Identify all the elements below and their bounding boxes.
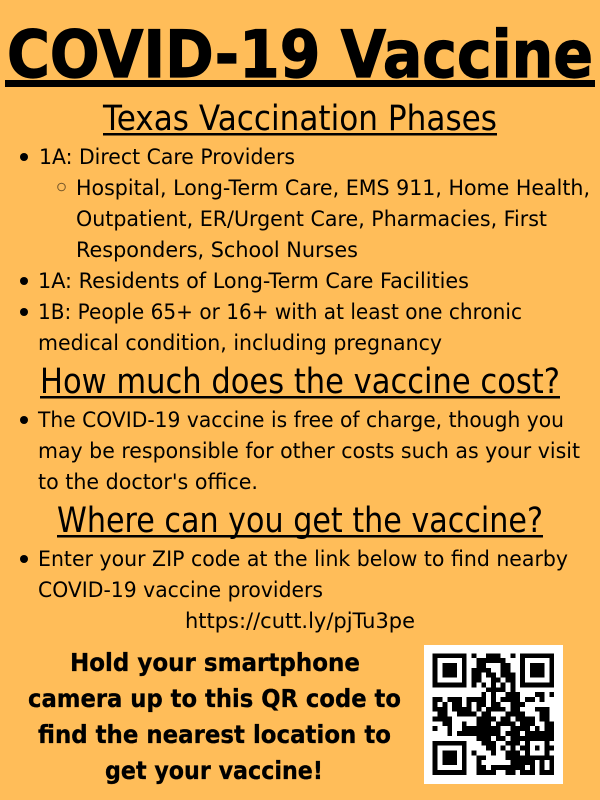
text block: where [20, 547, 568, 603]
list: vaccination phases: Hospital, Long-Term Care, EMS 911, Home Health, [76, 176, 590, 201]
QR finder: top right [520, 653, 554, 687]
QR data modules [433, 653, 554, 775]
list: vaccination phases [20, 145, 590, 356]
callout: QR instructions: camera up to this QR code to [28, 684, 401, 713]
text block: cost: may be responsible for other costs such as your visit [38, 439, 580, 464]
list: vaccination phases: 1B: People 65+ or 16+ with at least one chronic [38, 300, 522, 325]
callout: QR instructions: find the nearest location to [38, 720, 391, 749]
list: vaccination phases: 1A: Direct Care Providers [39, 145, 295, 170]
list: vaccination phases: Outpatient, ER/Urgent Care, Pharmacies, First [76, 207, 547, 232]
QR finder: top left [433, 653, 467, 687]
callout: QR instructions: get your vaccine! [105, 756, 323, 785]
list: vaccination phases: Responders, School Nurses [76, 238, 358, 263]
text block: cost [20, 408, 580, 495]
text block: cost: to the doctor's office. [38, 470, 258, 495]
list: vaccination phases: 1A: Residents of Long-Term Care Facilities [38, 269, 469, 294]
callout: QR instructions: Hold your smartphone [70, 648, 360, 677]
callout: QR instructions [28, 648, 401, 785]
QR code [424, 645, 563, 784]
text block: where: Enter your ZIP code at the link below to find nearby [38, 547, 568, 572]
heading: Where can you get the vaccine?: Where can you get the vaccine? [57, 501, 543, 541]
link: https://cutt.ly/pjTu3pe [185, 609, 415, 634]
text block: cost: The COVID-19 vaccine is free of charge, though you [37, 408, 564, 433]
heading: Texas Vaccination Phases: Texas Vaccination Phases [102, 99, 497, 139]
text block: where: COVID-19 vaccine providers [38, 578, 323, 603]
QR finder: bottom left [433, 741, 467, 775]
list: vaccination phases: medical condition, including pregnancy [38, 331, 442, 356]
